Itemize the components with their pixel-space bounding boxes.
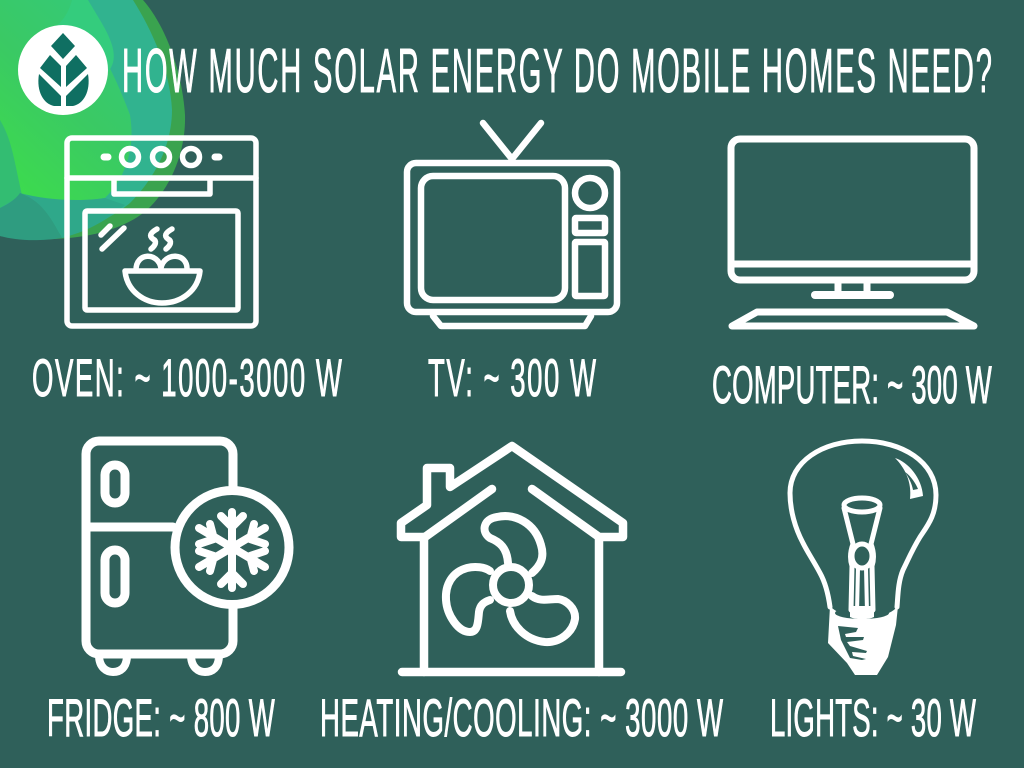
title: HOW MUCH SOLAR ENERGY DO MOBILE HOMES NEED? [122, 37, 992, 106]
label: heating and cooling: HEATING/COOLING: ~ 3000 W [320, 688, 723, 747]
icon: light bulb [790, 441, 936, 675]
icon: oven [67, 138, 256, 326]
icon: fridge [86, 441, 289, 672]
label: lights: LIGHTS: ~ 30 W [770, 688, 976, 747]
label: television: TV: ~ 300 W [428, 348, 596, 407]
icon: computer [731, 139, 974, 326]
label: computer: COMPUTER: ~ 300 W [712, 355, 992, 414]
logo [18, 25, 108, 115]
label: oven: OVEN: ~ 1000-3000 W [32, 348, 342, 407]
icon: television [407, 123, 617, 326]
label: fridge: FRIDGE: ~ 800 W [47, 688, 275, 747]
decorative green blob [0, 0, 185, 240]
icon: house with fan [401, 446, 623, 672]
